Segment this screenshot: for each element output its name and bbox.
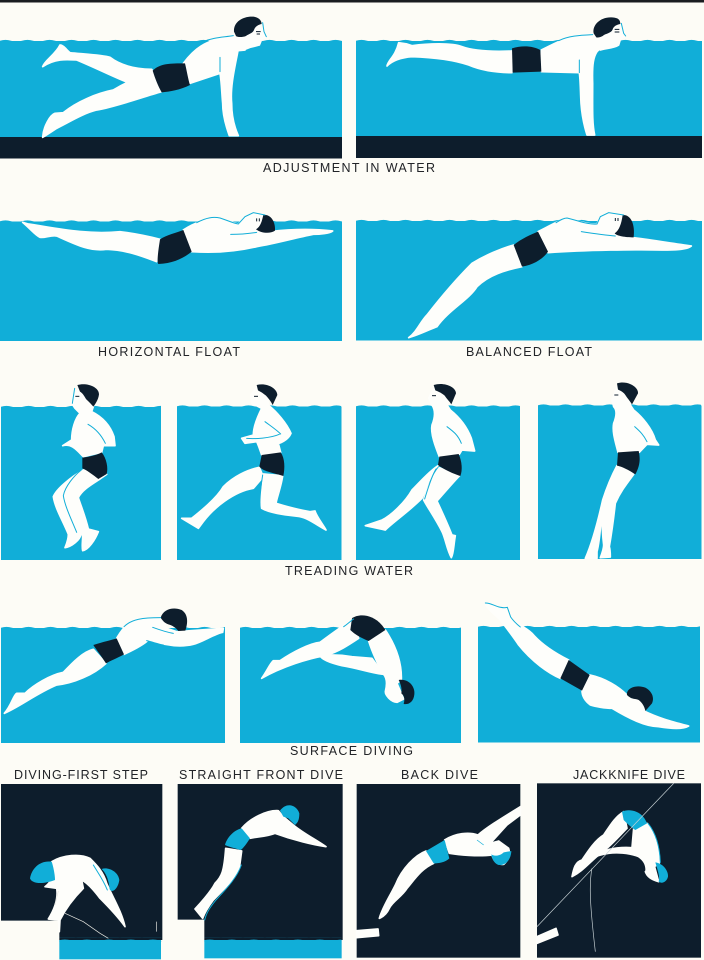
- panel: diving first step: [1, 784, 162, 959]
- panel: surface diving 1: [1, 609, 225, 743]
- figure: treading with knees bent: [53, 384, 115, 551]
- diving board: [357, 929, 379, 938]
- panel: jackknife dive: [537, 783, 701, 958]
- figure: diver crouching on the edge: [30, 855, 157, 938]
- figure: diver folded in jackknife: [537, 783, 674, 952]
- figure: swimmer diving head first: [485, 603, 689, 728]
- figure: swimmer with leg raised: [43, 17, 266, 137]
- caption: treading water: TREADING WATER: [285, 564, 413, 578]
- panel: treading water 4: [538, 382, 702, 559]
- figure: swimmer in balanced float: [409, 213, 691, 338]
- caption: jackknife dive: JACKKNIFE DIVE: [573, 768, 685, 782]
- panel: straight front dive: [178, 784, 343, 958]
- caption: adjustment in water: ADJUSTMENT IN WATER: [263, 161, 435, 175]
- panel: surface diving 3: [478, 603, 700, 742]
- panel: treading water 1: [1, 384, 161, 560]
- caption: surface diving: SURFACE DIVING: [290, 744, 413, 758]
- figure: swimmer bending at the hips: [262, 615, 414, 704]
- panel: treading water 2: [177, 384, 342, 560]
- figure: swimmer level with water: [387, 17, 626, 135]
- diving board: [537, 928, 558, 943]
- caption: straight front dive: STRAIGHT FRONT DIVE: [179, 768, 343, 782]
- caption: back dive: BACK DIVE: [401, 768, 478, 782]
- panel: horizontal float: [0, 213, 342, 341]
- panel: adjustment in water, body level: [356, 17, 702, 158]
- figure: treading with wide scissor kick: [182, 384, 326, 530]
- figure: treading with legs nearly straight: [585, 382, 659, 558]
- caption: balanced float: BALANCED FLOAT: [466, 345, 592, 359]
- panel: balanced float: [356, 213, 702, 340]
- figure: swimmer floating horizontally: [23, 213, 333, 264]
- panel: adjustment in water, arm extended: [0, 17, 342, 159]
- figure: diver leaning forward to dive: [195, 805, 326, 920]
- panel: treading water 3: [356, 384, 520, 560]
- panel: surface diving 2: [240, 615, 461, 743]
- caption: diving first step: DIVING-FIRST STEP: [14, 768, 148, 782]
- panel: back dive: [357, 784, 520, 958]
- caption: horizontal float: HORIZONTAL FLOAT: [98, 345, 240, 359]
- figure: treading with one leg trailing: [365, 384, 475, 558]
- figure: diver arching backward: [379, 807, 520, 918]
- figure: swimmer starting surface dive: [4, 609, 223, 713]
